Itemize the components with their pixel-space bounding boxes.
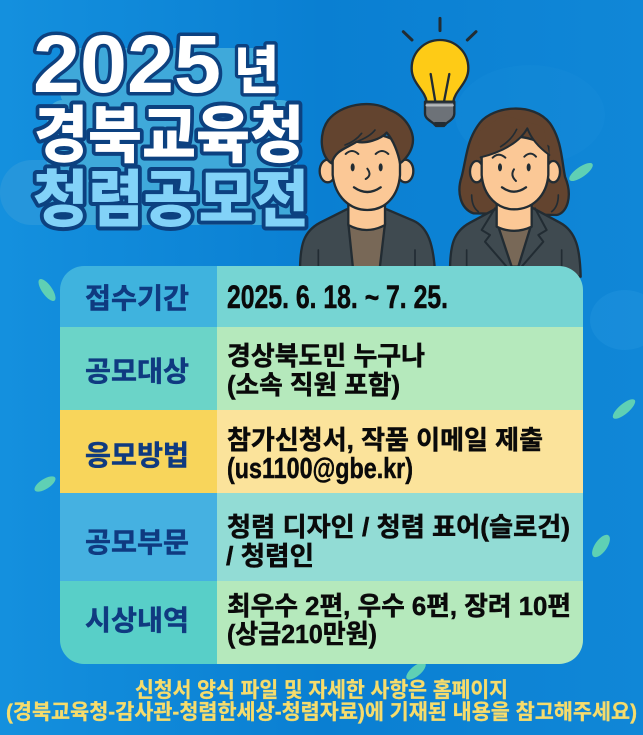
title bbox=[33, 19, 309, 239]
footer note: (경북교육청-감사관-청렴한세상-청렴자료)에 기재된 내용을 참고해주세요) bbox=[6, 701, 637, 724]
row: submission period: 2025. 6. 18. ~ 7. 25. bbox=[227, 279, 448, 315]
row: eligibility: (소속 직원 포함) bbox=[227, 370, 400, 400]
icon: light bulb bbox=[403, 18, 476, 126]
row: how to apply: (us1100@gbe.kr) bbox=[227, 453, 413, 485]
title line: 2025 year: 2025 bbox=[33, 19, 221, 110]
row: eligibility: 경상북도민 누구나 bbox=[227, 341, 425, 371]
row: categories: 공모부문 bbox=[85, 521, 189, 561]
person: woman bbox=[450, 109, 581, 277]
row: eligibility: 공모대상 bbox=[85, 350, 189, 390]
title line: contest: 청렴공모전 bbox=[33, 149, 309, 239]
title line: 2025 year: 년 bbox=[234, 29, 279, 104]
row: categories: / 청렴인 bbox=[226, 541, 314, 571]
row: submission period bbox=[85, 277, 448, 317]
row: submission period: 접수기간 bbox=[85, 277, 189, 317]
row: awards: 시상내역 bbox=[85, 599, 189, 639]
person: man bbox=[300, 104, 435, 272]
row: how to apply: 응모방법 bbox=[85, 434, 189, 474]
info table bbox=[60, 266, 583, 664]
row: awards bbox=[85, 591, 571, 649]
row: how to apply bbox=[85, 425, 543, 485]
decorative leaves bbox=[32, 160, 638, 683]
row: eligibility bbox=[85, 341, 425, 400]
row: awards: 최우수 2편, 우수 6편, 장려 10편 bbox=[227, 591, 571, 621]
illustration bbox=[300, 18, 581, 277]
row: how to apply: 참가신청서, 작품 이메일 제출 bbox=[227, 425, 543, 455]
row: categories bbox=[85, 512, 570, 571]
row: categories: 청렴 디자인 / 청렴 표어(슬로건) bbox=[227, 512, 570, 542]
title line: organisation: 경북교육청 bbox=[34, 85, 304, 175]
row: awards: (상금210만원) bbox=[227, 619, 377, 649]
footer note bbox=[6, 679, 637, 724]
footer note: 신청서 양식 파일 및 자세한 사항은 홈페이지 bbox=[135, 679, 508, 702]
